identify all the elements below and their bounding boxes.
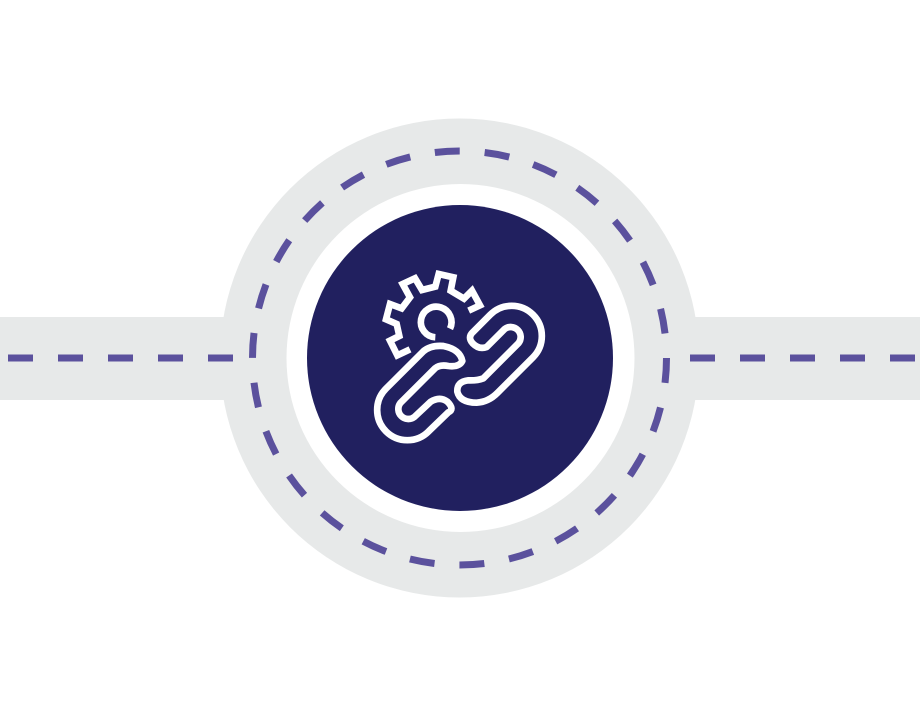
- icon: gear outline: [386, 274, 480, 355]
- grey ring: [220, 118, 699, 598]
- road: right: [680, 317, 920, 400]
- dashed circular track: [252, 151, 666, 565]
- right road dashes: [690, 354, 915, 362]
- navy centre disc: [307, 205, 613, 511]
- icon: gear hub arc: [421, 307, 452, 337]
- icon: lower chain link: [377, 346, 462, 440]
- road: left: [0, 317, 240, 400]
- icon: chain links and gear: [377, 274, 542, 440]
- white inner disc: [286, 184, 634, 532]
- icon: upper chain link: [457, 306, 542, 403]
- left road dashes: [8, 354, 233, 362]
